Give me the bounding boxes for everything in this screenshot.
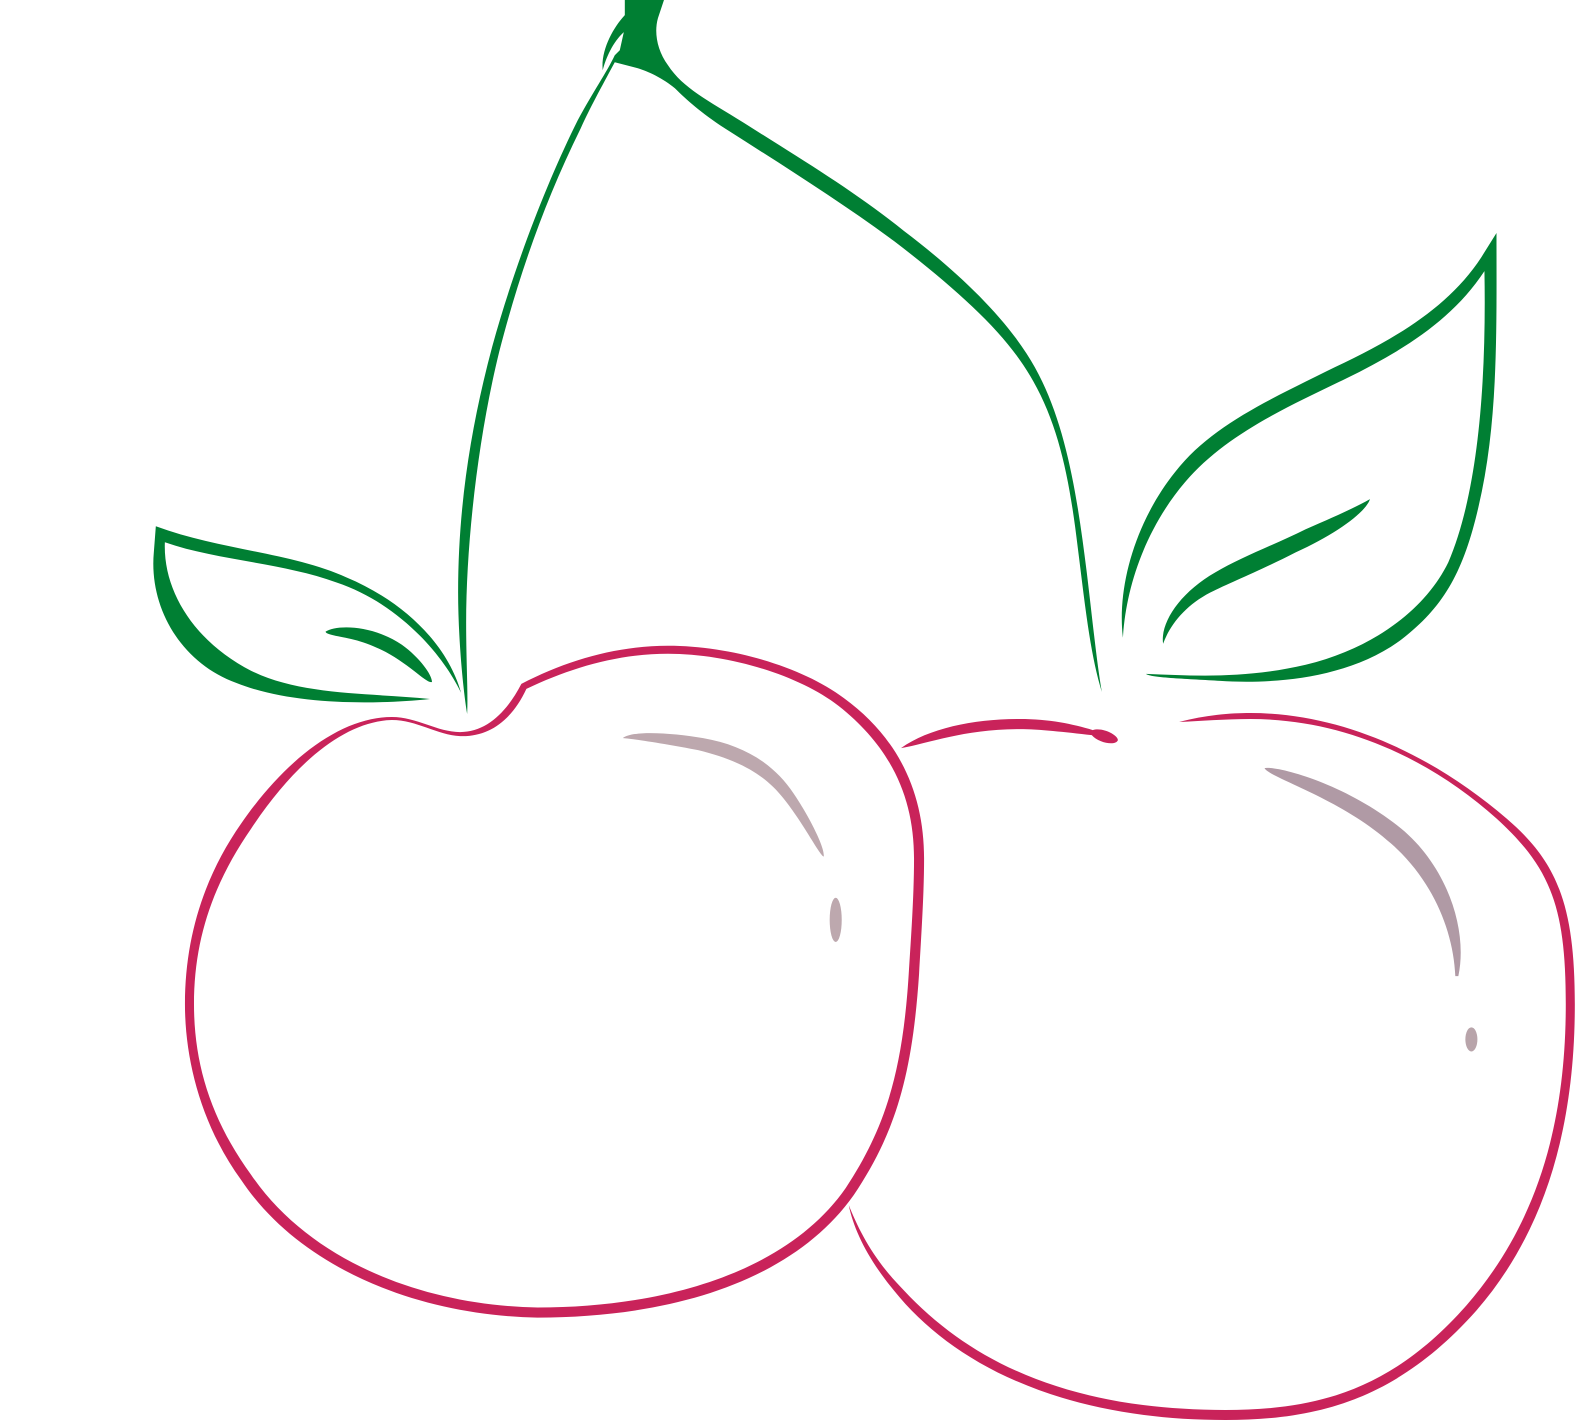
cherry stems xyxy=(458,0,1102,714)
left leaf vein xyxy=(326,627,432,682)
left leaf xyxy=(153,526,461,702)
right leaf xyxy=(1122,233,1497,682)
right cherry highlight dot xyxy=(1465,1027,1477,1051)
left cherry highlight xyxy=(623,733,824,857)
right leaf vein xyxy=(1163,499,1370,644)
small crimson stem nub on right cherry xyxy=(901,719,1118,748)
right cherry outline xyxy=(849,713,1575,1420)
left cherry highlight dot xyxy=(830,898,842,942)
right cherry highlight xyxy=(1265,768,1461,976)
left cherry outline xyxy=(185,646,924,1318)
